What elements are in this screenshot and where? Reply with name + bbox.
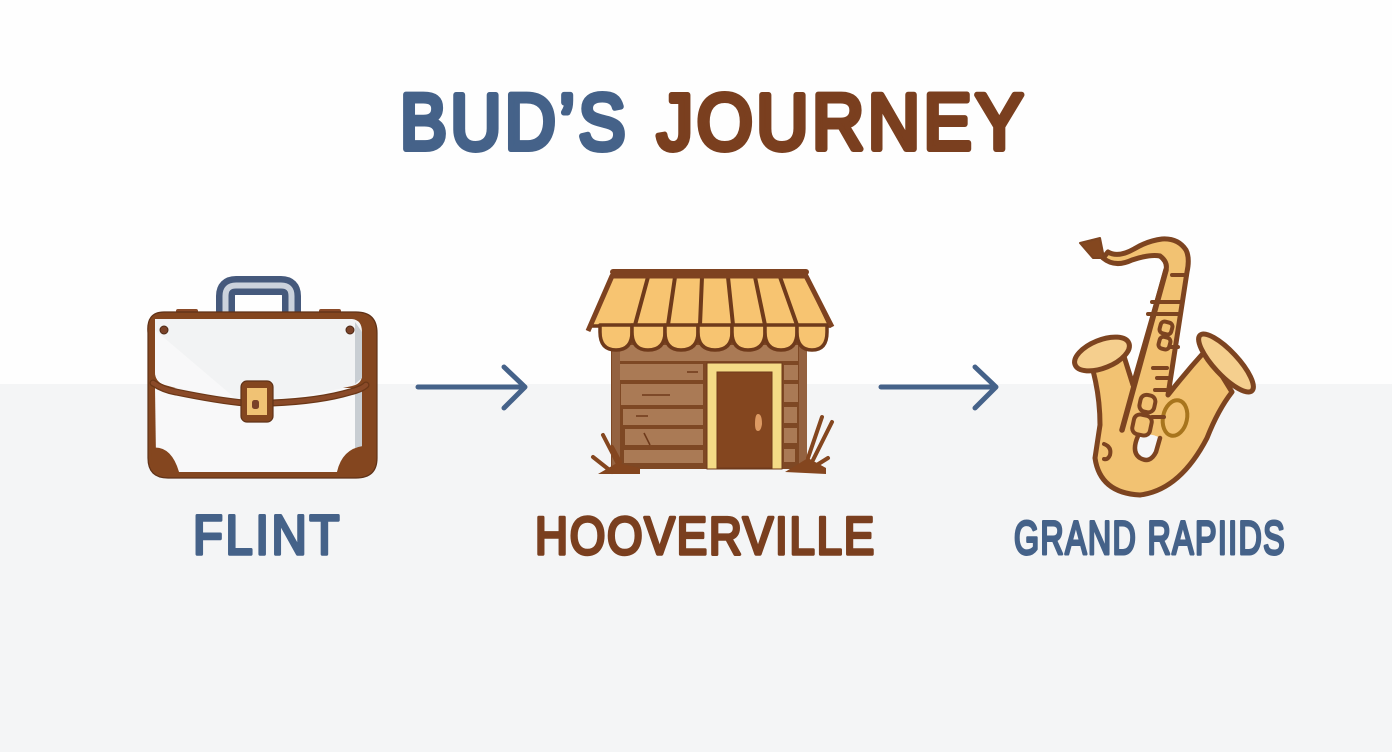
label: Hooverville: HOOVERVILLE	[535, 507, 876, 566]
briefcase clasp	[241, 381, 273, 422]
grass	[593, 417, 832, 474]
title: BUD’S	[400, 77, 629, 166]
briefcase handle	[226, 286, 292, 313]
icon: shack	[588, 272, 832, 474]
icon: briefcase	[148, 286, 377, 478]
arrow: Hooverville to Grand Rapids	[881, 367, 996, 408]
briefcase corners	[150, 448, 178, 472]
saxophone body	[1092, 239, 1232, 495]
saxophone neck divider	[1122, 270, 1166, 430]
shack awning	[588, 272, 832, 350]
saxophone keys	[1104, 275, 1190, 459]
briefcase body	[148, 312, 377, 478]
title: JOURNEY	[657, 77, 1027, 166]
title	[400, 77, 1027, 166]
saxophone loop opening	[1135, 434, 1160, 460]
saxophone mouthpiece	[1080, 238, 1104, 258]
shack walls	[611, 340, 807, 469]
arrow: Flint to Hooverville	[418, 367, 525, 408]
label: Flint: FLINT	[193, 503, 342, 566]
saxophone left bell	[1070, 330, 1134, 378]
shack door	[707, 363, 782, 469]
briefcase flap line	[153, 383, 366, 403]
saxophone right bell	[1191, 327, 1261, 399]
icon: saxophone	[1070, 238, 1261, 495]
